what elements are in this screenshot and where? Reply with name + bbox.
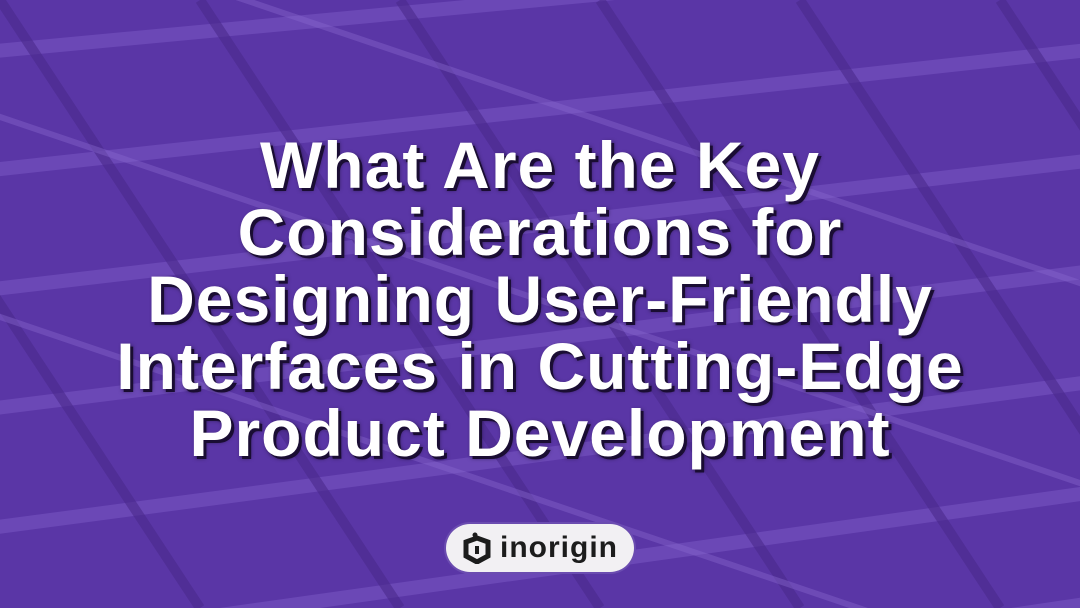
title: Product Development <box>189 396 891 470</box>
icon: inorigin mark <box>464 532 490 564</box>
title: Interfaces in Cutting-Edge <box>116 329 964 403</box>
title: Designing User-Friendly <box>147 262 933 336</box>
title: What Are the Key <box>260 128 820 202</box>
logo: inorigin <box>446 524 634 572</box>
title: Considerations for <box>238 195 842 269</box>
logo: inorigin: inorigin <box>500 531 618 564</box>
title <box>116 128 965 474</box>
